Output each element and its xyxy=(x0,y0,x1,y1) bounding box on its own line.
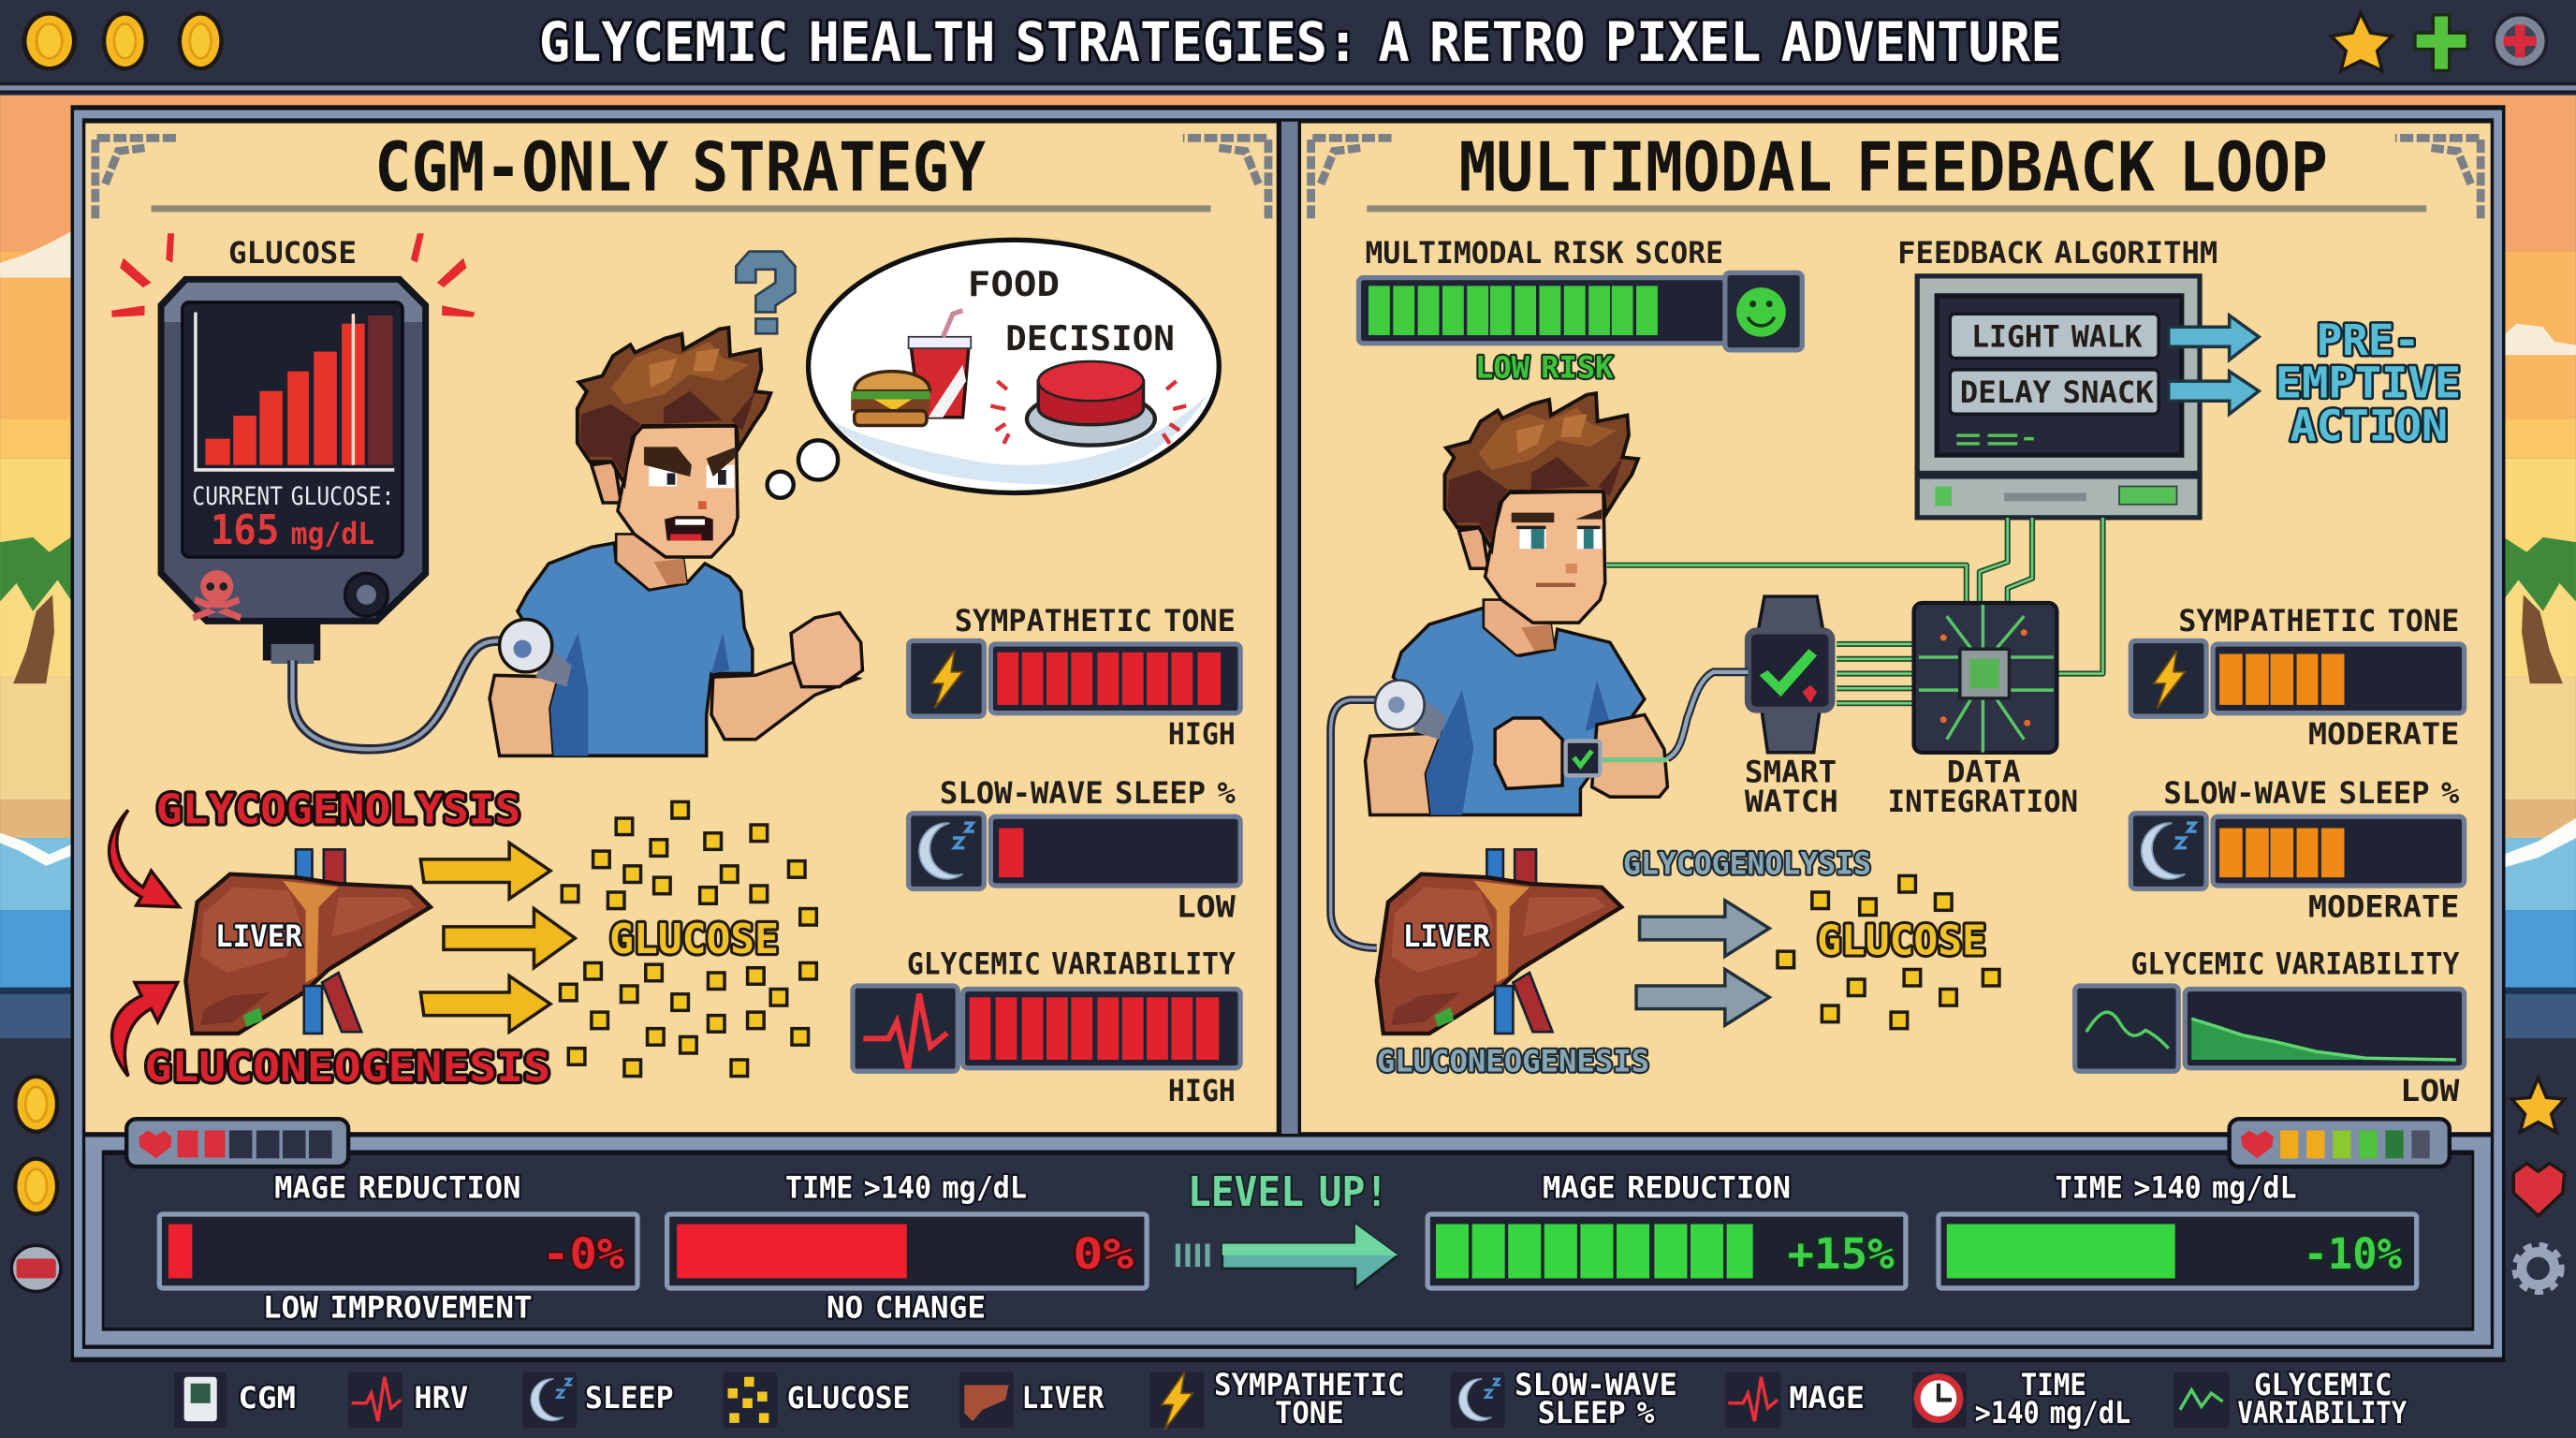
glucose readout: mg/dL xyxy=(291,518,374,551)
thought bubble xyxy=(768,240,1219,498)
left arm xyxy=(490,675,559,756)
header bar xyxy=(0,0,2576,94)
meter: glycemic variability high: GLYCEMIC VARIABILITY xyxy=(907,948,1236,982)
legend: slow-wave sleep xyxy=(1451,1369,1677,1431)
callout: level up: LEVEL UP! xyxy=(1188,1168,1388,1216)
heading: multimodal feedback loop: MULTIMODAL FEEDBACK LOOP xyxy=(1459,128,2328,207)
stat: MAGE reduction, multimodal xyxy=(1427,1171,1906,1288)
shirt xyxy=(518,543,753,756)
stat: MAGE reduction, CGM-only: MAGE REDUCTION xyxy=(274,1171,520,1205)
stat: time above 140, CGM-only xyxy=(667,1171,1147,1326)
forearm xyxy=(1592,714,1667,797)
data integration chip xyxy=(1914,603,2056,753)
arrows: grey glucose release xyxy=(1636,901,1769,1025)
arrow: curved red top xyxy=(110,810,179,907)
cable: smartwatch to wrist xyxy=(1667,672,1748,758)
icon: side red button xyxy=(11,1245,61,1291)
label: gluconeogenesis: GLUCONEOGENESIS xyxy=(145,1044,550,1092)
icon: green plus xyxy=(2415,15,2467,70)
icon: alarm sparks xyxy=(111,233,475,317)
meter: sympathetic tone high: SYMPATHETIC TONE xyxy=(955,605,1236,638)
icon: small heart xyxy=(1802,685,1817,703)
icon: smiley xyxy=(1736,287,1786,337)
legend: liver: LIVER xyxy=(1022,1382,1105,1416)
stat: MAGE reduction, multimodal: MAGE REDUCTION xyxy=(1543,1171,1791,1205)
panel corner ornaments xyxy=(95,138,1268,218)
health bar: right xyxy=(2230,1119,2450,1167)
stat: time above 140, multimodal: TIME >140 mg/dL xyxy=(2056,1171,2297,1205)
diagram: liver glucose output, high xyxy=(110,785,818,1092)
feedback computer xyxy=(1897,237,2461,518)
arrows: yellow glucose release xyxy=(420,843,575,1032)
legend: MAGE: MAGE xyxy=(1789,1382,1865,1416)
diagram: liver glucose output, low xyxy=(1377,848,2001,1078)
cable: CGM to sensor xyxy=(292,640,501,749)
arrow: level up xyxy=(1178,1224,1398,1288)
legend: time above 140 xyxy=(1912,1369,2130,1431)
feedback computer: FEEDBACK ALGORITHM xyxy=(1897,237,2217,271)
meter: sympathetic tone moderate xyxy=(2130,605,2465,752)
label: glycogenolysis: GLYCOGENOLYSIS xyxy=(156,785,520,833)
legend: slow-wave sleep: SLEEP % xyxy=(1538,1397,1654,1431)
left arm xyxy=(1365,733,1442,814)
glucose readout xyxy=(192,483,394,554)
glucose particles xyxy=(559,800,818,1078)
arrow: delay snack to action xyxy=(2169,372,2259,414)
legend: glucose: GLUCOSE xyxy=(787,1382,910,1416)
head xyxy=(1444,393,1638,655)
meter: slow-wave sleep moderate: MODERATE xyxy=(2308,890,2459,924)
label: pre-emptive action xyxy=(2276,315,2461,450)
label: smart watch xyxy=(1745,756,1838,819)
meter: sympathetic tone high xyxy=(909,605,1240,752)
meter: glycemic variability low: LOW xyxy=(2400,1075,2460,1108)
panel: multimodal feedback loop xyxy=(1301,124,2491,1132)
icon: wrist watch xyxy=(1566,741,1600,775)
stat: time above 140, CGM-only: 0% xyxy=(1073,1229,1134,1279)
icon: red cross gear xyxy=(2494,15,2546,67)
stat: MAGE reduction, CGM-only xyxy=(159,1171,637,1326)
label: food: FOOD xyxy=(968,264,1060,304)
panel: CGM-only strategy xyxy=(85,124,1277,1132)
legend: MAGE xyxy=(1725,1372,1865,1428)
icon: gear xyxy=(2515,1245,2561,1291)
meter: slow-wave sleep moderate xyxy=(2130,777,2465,924)
label: data integration: DATA xyxy=(1947,756,2021,789)
label: pre-emptive action: EMPTIVE xyxy=(2276,359,2461,408)
label: glucose: GLUCOSE xyxy=(1817,917,1986,965)
legend: HRV: HRV xyxy=(414,1382,468,1416)
stat: time above 140, CGM-only: NO CHANGE xyxy=(827,1292,986,1326)
side icons left xyxy=(11,1075,61,1291)
icon: question mark xyxy=(736,252,795,333)
label: decision: DECISION xyxy=(1005,318,1175,359)
legend: glycemic variability: GLYCEMIC xyxy=(2254,1369,2392,1402)
meter: glycemic variability high xyxy=(853,948,1240,1108)
button: delay snack xyxy=(1950,370,2159,414)
legend: HRV xyxy=(348,1372,468,1428)
meter: glycemic variability low xyxy=(2075,948,2465,1108)
meter: sympathetic tone high: HIGH xyxy=(1168,718,1236,752)
label: gluconeogenesis: GLUCONEOGENESIS xyxy=(1377,1045,1649,1078)
meter: slow-wave sleep low: LOW xyxy=(1177,890,1237,924)
meter: glycemic variability low: GLYCEMIC VARIABILITY xyxy=(2130,948,2459,982)
data wires xyxy=(1606,518,2102,703)
legend: sympathetic tone: SYMPATHETIC xyxy=(1214,1369,1405,1402)
icon: soda cup xyxy=(909,311,971,418)
label: smart watch: WATCH xyxy=(1745,785,1838,819)
icon: arm sensor xyxy=(1375,681,1445,740)
smartwatch xyxy=(1748,596,1832,753)
meter: sympathetic tone moderate: SYMPATHETIC TONE xyxy=(2178,605,2459,638)
icon: check mark xyxy=(1760,649,1817,697)
label: pre-emptive action: PRE- xyxy=(2317,315,2420,365)
legend: time above 140: >140 mg/dL xyxy=(1975,1397,2130,1431)
label: low risk: LOW RISK xyxy=(1475,352,1613,386)
risk score meter xyxy=(1358,237,1802,386)
meter: slow-wave sleep moderate: SLOW-WAVE SLEEP % xyxy=(2163,777,2459,811)
character: calm man xyxy=(1365,393,1667,814)
stat: MAGE reduction, multimodal: +15% xyxy=(1788,1229,1895,1279)
stat: time above 140, multimodal xyxy=(1939,1171,2417,1288)
icon: header star xyxy=(2331,13,2392,70)
arrow: light walk to action xyxy=(2169,315,2259,360)
side icons right xyxy=(2511,1078,2565,1291)
icon: heart xyxy=(2513,1164,2565,1216)
stat: MAGE reduction, CGM-only: -0% xyxy=(542,1229,625,1279)
icon: header coins xyxy=(22,11,224,70)
label: pre-emptive action: ACTION xyxy=(2291,401,2448,450)
risk score meter: MULTIMODAL RISK SCORE xyxy=(1365,237,1723,271)
legend xyxy=(174,1369,2407,1431)
CGM device xyxy=(158,276,429,664)
legend: sleep xyxy=(522,1372,674,1428)
meter: slow-wave sleep low xyxy=(909,777,1240,924)
shirt xyxy=(1393,608,1645,814)
icon: skull xyxy=(192,570,242,621)
meter: glycemic variability high: HIGH xyxy=(1168,1075,1236,1108)
icon: device button xyxy=(345,574,388,616)
meter: sympathetic tone moderate: MODERATE xyxy=(2308,718,2459,752)
legend: sympathetic tone: TONE xyxy=(1275,1397,1344,1431)
button: delay snack: DELAY SNACK xyxy=(1960,376,2154,410)
legend: glycemic variability xyxy=(2174,1369,2407,1431)
legend: sympathetic tone xyxy=(1150,1369,1405,1431)
label: smart watch: SMART xyxy=(1745,756,1837,789)
icon: liver xyxy=(1377,849,1621,1034)
label: data integration: INTEGRATION xyxy=(1888,785,2078,819)
button: light walk xyxy=(1950,314,2159,359)
right arm xyxy=(711,662,857,740)
button: light walk: LIGHT WALK xyxy=(1971,320,2143,354)
legend: glucose xyxy=(723,1372,910,1428)
label: glycogenolysis: GLYCOGENOLYSIS xyxy=(1623,848,1871,882)
icon: burger xyxy=(851,372,929,426)
meter: slow-wave sleep low: SLOW-WAVE SLEEP % xyxy=(940,777,1236,811)
character: frustrated man xyxy=(490,328,862,756)
icon: red button xyxy=(990,361,1186,446)
panel corner ornaments xyxy=(1311,138,2481,218)
label: data integration xyxy=(1888,756,2078,819)
panel: outcomes bottom bar xyxy=(85,1119,2491,1344)
icon: fist xyxy=(791,613,862,687)
label: liver: LIVER xyxy=(215,920,303,954)
stat: time above 140, multimodal: -10% xyxy=(2304,1229,2402,1279)
title: GLYCEMIC HEALTH STRATEGIES: A RETRO PIXEL ADVENTURE xyxy=(539,10,2062,74)
glucose readout: CURRENT GLUCOSE: xyxy=(192,483,394,511)
stat: time above 140, CGM-only: TIME >140 mg/dL xyxy=(785,1171,1027,1205)
cable: sensor to liver xyxy=(1331,700,1377,948)
legend: time above 140: TIME xyxy=(2021,1369,2086,1402)
legend: liver xyxy=(959,1372,1105,1428)
legend: CGM xyxy=(174,1372,296,1428)
legend: CGM: CGM xyxy=(239,1382,296,1416)
label: liver: LIVER xyxy=(1403,920,1491,954)
stat: MAGE reduction, CGM-only: LOW IMPROVEMENT xyxy=(263,1292,533,1326)
head xyxy=(592,426,738,590)
glucose particles xyxy=(1776,874,2001,1030)
health bar: left xyxy=(126,1119,348,1167)
heading: CGM-only strategy: CGM-ONLY STRATEGY xyxy=(374,128,987,207)
legend: sleep: SLEEP xyxy=(585,1382,674,1416)
icon: liver xyxy=(185,849,431,1034)
arrow: curved red bottom xyxy=(112,983,178,1077)
label: glucose: GLUCOSE xyxy=(609,916,779,963)
icon: arm sensor xyxy=(500,620,572,687)
callout: level up xyxy=(1178,1168,1398,1288)
legend: glycemic variability: VARIABILITY xyxy=(2237,1397,2407,1431)
label: glucose: GLUCOSE xyxy=(228,237,357,271)
glucose readout: 165 xyxy=(211,506,279,554)
glucose bar chart xyxy=(196,312,394,470)
hand xyxy=(1495,718,1562,788)
legend: slow-wave sleep: SLOW-WAVE xyxy=(1515,1369,1677,1402)
